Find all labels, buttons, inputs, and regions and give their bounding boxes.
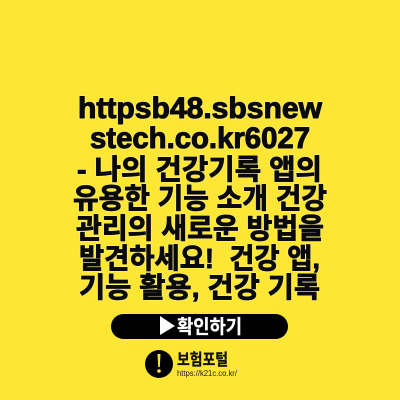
logo: 보험포털	[145, 350, 238, 378]
title: 기능 활용, 건강 기록	[79, 272, 320, 303]
button: 확인하기	[111, 314, 288, 339]
icon: play triangle	[160, 316, 175, 335]
title: 관리의 새로운 방법을	[76, 213, 324, 244]
title	[73, 92, 327, 303]
title: stech.co.kr6027	[90, 122, 310, 155]
logo url: https://k21c.co.kr/	[177, 368, 238, 378]
icon: exclamation circle	[145, 350, 173, 378]
title: httpsb48.sbsnew	[78, 92, 323, 125]
button label: 확인하기	[177, 316, 242, 338]
title: 유용한 기능 소개 건강	[73, 183, 327, 214]
title: 발견하세요! 건강 앱,	[79, 243, 320, 274]
title: - 나의 건강기록 앱의	[77, 154, 322, 185]
logo name: 보험포털	[177, 351, 228, 369]
